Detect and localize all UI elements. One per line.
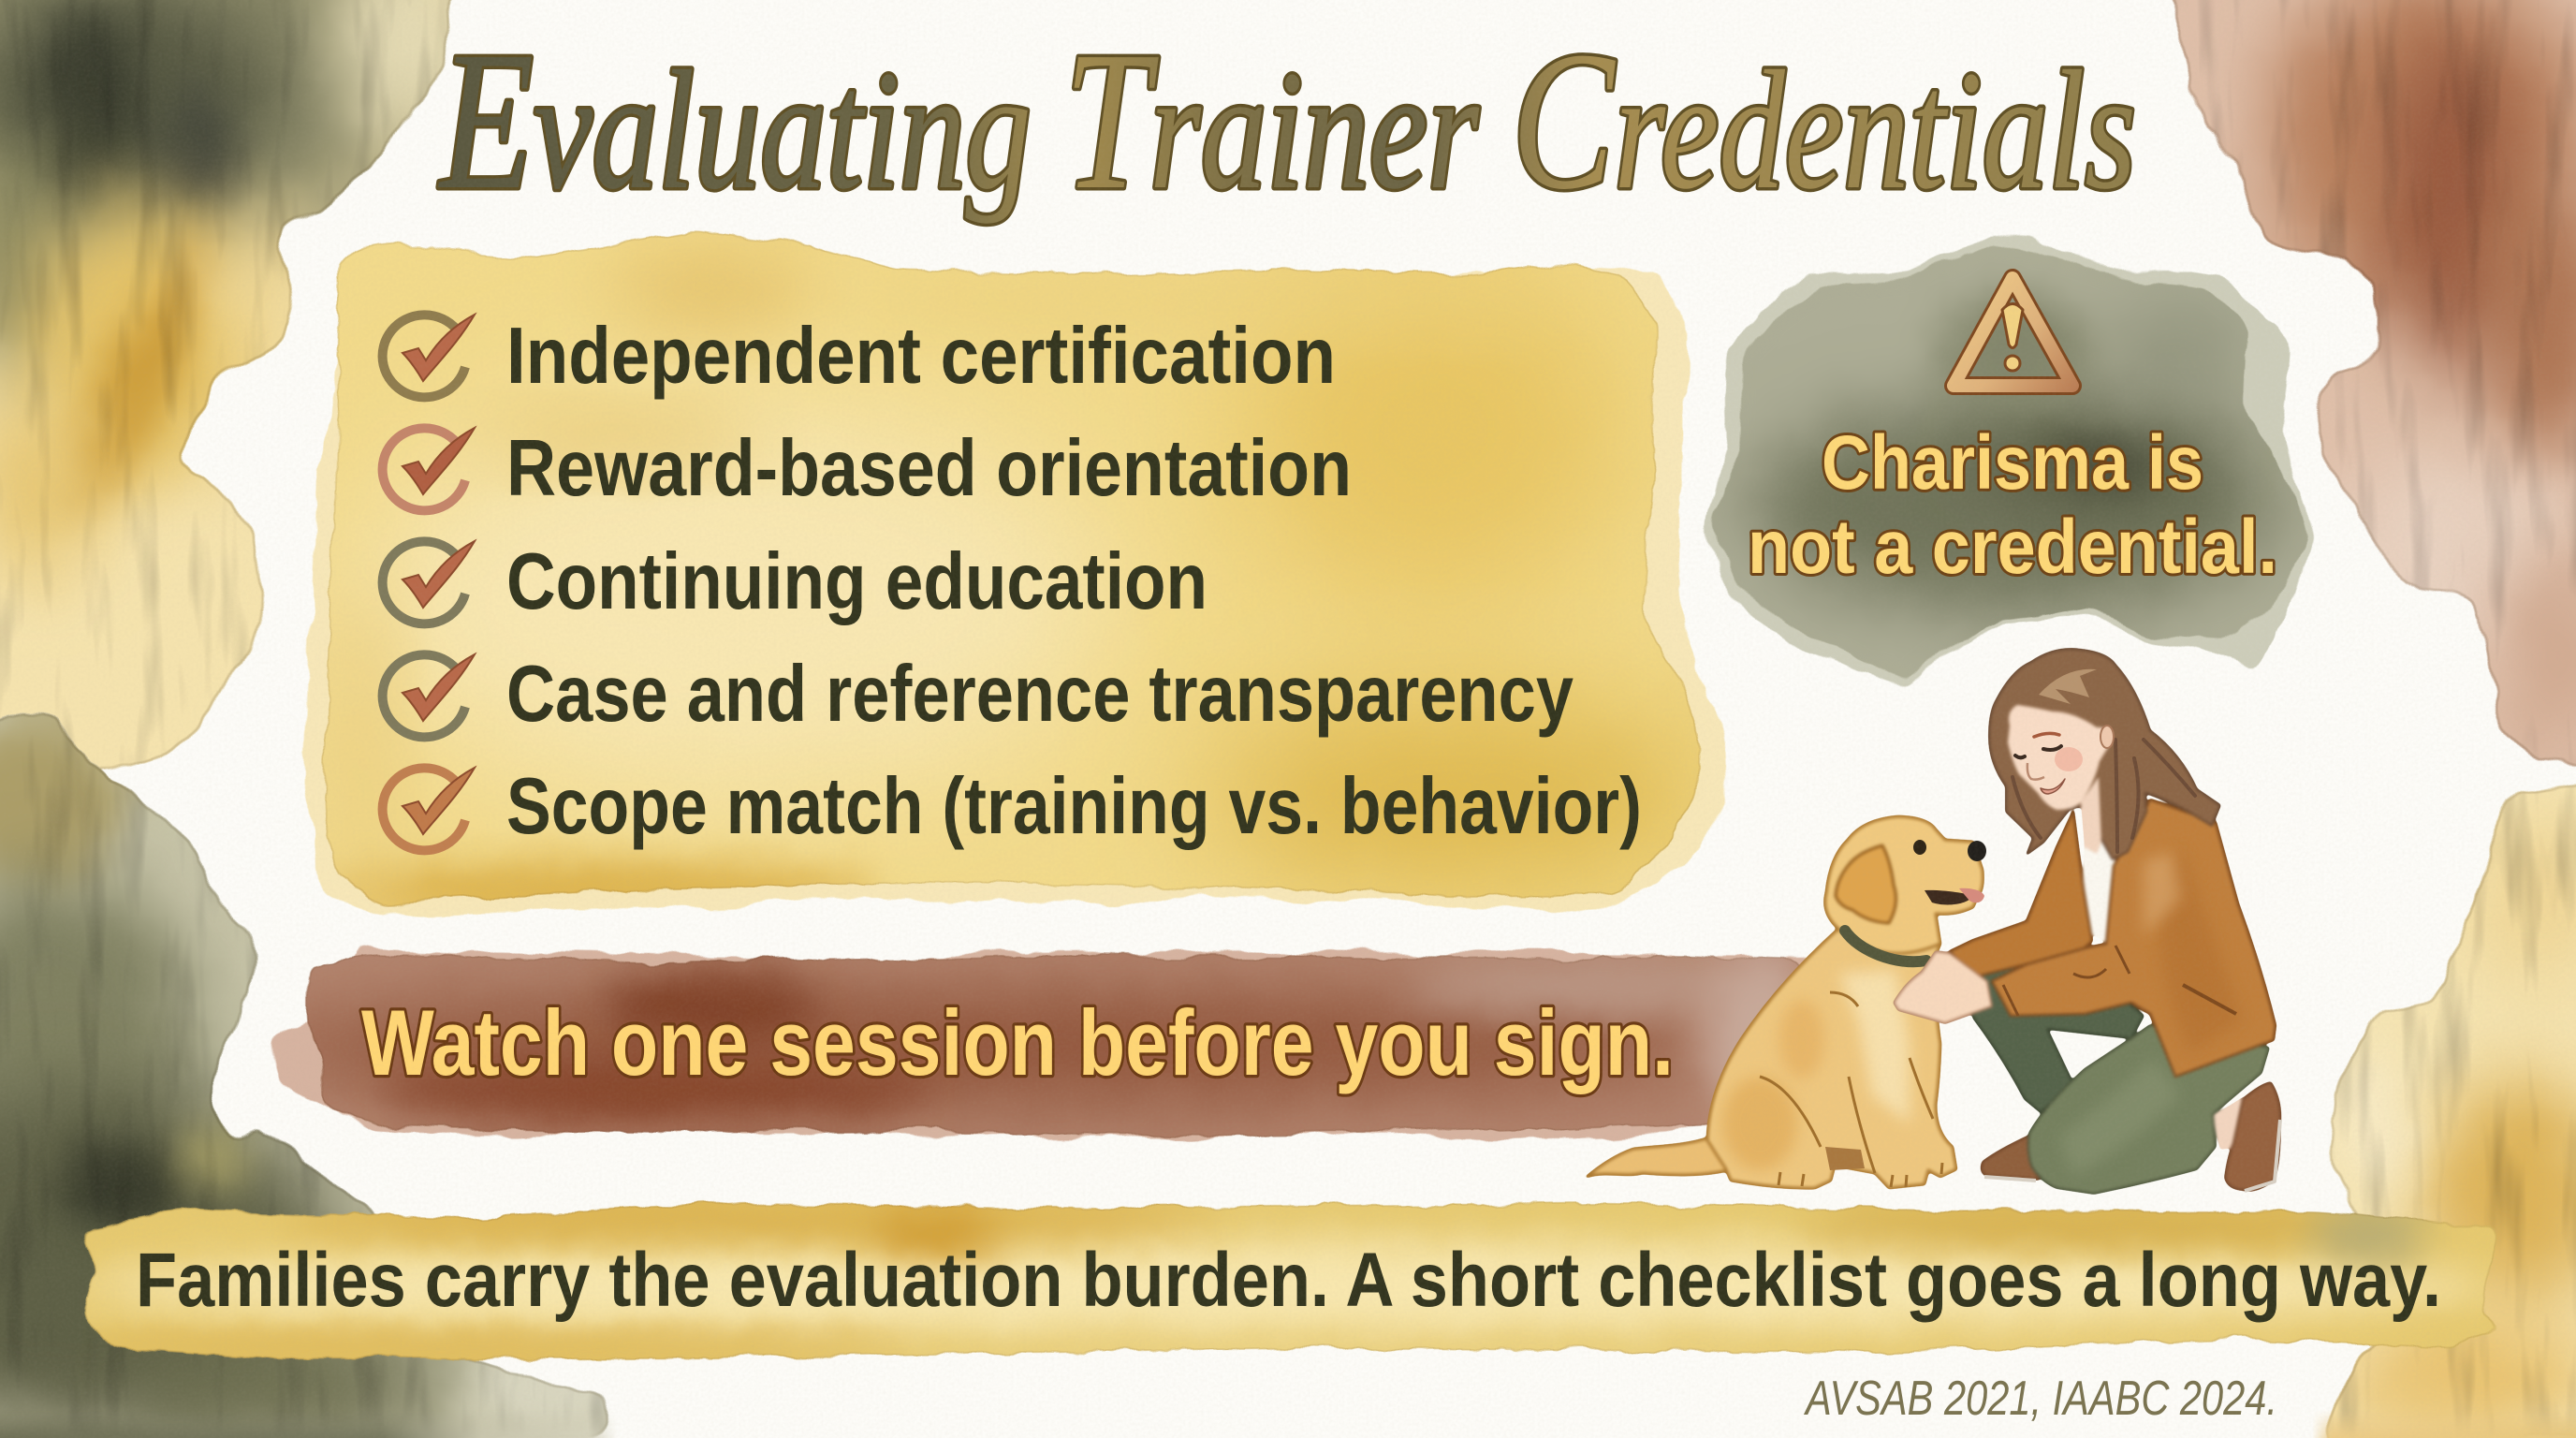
shirt [2084,818,2115,944]
callout text: Charisma is [1822,420,2203,506]
panel: checklist [300,215,1732,927]
dog head [1825,816,1983,953]
item text: Independent certification [506,312,1336,401]
jacket shading [2159,847,2242,1053]
panel: charisma warning [1685,225,2340,702]
icon: check mark [402,315,475,381]
item text: Scope match (training vs. behavior) [506,762,1642,851]
back hair [1989,649,2220,859]
banner wash [234,946,1825,1147]
smile [2041,779,2065,794]
watercolor wash: bottom left [0,712,655,1438]
leg highlight [2059,1058,2181,1175]
jacket body and near sleeve [1992,800,2276,1077]
dog under-belly shadow [1825,1147,1865,1170]
check item 1 [383,312,1336,401]
check item 5 [383,762,1642,851]
illustration: golden retriever [1587,816,1986,1188]
check item 3 [383,537,1208,626]
item text: Case and reference transparency [506,650,1573,739]
item text: Reward-based orientation [506,424,1352,513]
icon: check ring [383,541,465,624]
icon: check mark [402,428,475,494]
dog mouth [1925,890,1973,904]
jacket pale patch [2144,852,2181,936]
dog body [1707,927,1956,1188]
icon: warning dot [2005,356,2020,371]
panel wash [300,215,1732,927]
watercolor wash: bottom left lower edge [0,1417,614,1438]
nose [2027,763,2044,780]
banner: watch one session [234,946,1835,1147]
eyebrow [2034,733,2059,737]
dog shoulder patch [1779,1000,1824,1078]
callout text: not a credential. [1748,505,2277,590]
icon: check ring [383,428,465,510]
far sleeve [1950,811,2092,977]
watercolor wash: bottom right [2284,758,2576,1438]
illustration: trainer [1894,649,2280,1194]
dog shapes [1587,816,1983,1188]
dog chest highlight [1839,970,1910,1123]
kneeling leg [2028,1025,2269,1194]
banner text: Watch one session before you sign. [361,990,1674,1094]
dog eye [1913,840,1926,855]
trainer shapes [1894,649,2280,1194]
hair highlight [2039,669,2097,704]
ankle [2213,1097,2243,1150]
check item 4 [383,650,1573,739]
citation: AVSAB 2021, IAABC 2024. [1804,1372,2277,1426]
hair strands [2012,740,2195,852]
banner pale outer wash [267,949,1835,1138]
icon: check mark [402,541,475,608]
watercolor wash: bottom right lower edge [2312,1410,2576,1438]
icon: check ring [383,768,465,850]
raised leg [1973,944,2144,1112]
panel pale outer wash [304,267,1724,916]
sleeve creases and cuff line [2003,946,2130,1016]
dog collar [1845,931,1926,961]
icon: check mark [402,654,475,721]
callout wash [1685,225,2340,702]
banner: families checklist [19,1194,2518,1372]
dog shading [1722,1077,1797,1170]
icon: warning triangle [1954,278,2072,386]
neck [2081,777,2101,854]
check item 2 [383,424,1352,513]
dog tongue [1959,888,1984,902]
eyes [2015,746,2061,757]
callout pale outer wash [1706,234,2314,688]
dog ear [1836,845,1896,923]
back boot [2225,1082,2280,1191]
front shoe [1982,1135,2039,1180]
watercolor wash: top left [0,0,452,770]
face [2008,705,2110,810]
dog fur and paw lines [1760,992,1942,1187]
icon: check ring [383,315,465,397]
icon: check ring [383,654,465,737]
dog nose [1968,841,1986,861]
item text: Continuing education [506,537,1208,626]
shoe soles [1984,1120,2280,1191]
title: Evaluating Trainer Credentials [438,10,2136,230]
dog tail [1587,1137,1728,1177]
ear [2100,726,2114,748]
jacket pocket [2183,985,2236,1014]
watercolor wash: top right [2153,0,2576,805]
cheek blush [2055,747,2083,771]
illustration: dog and trainer [1587,649,2280,1194]
banner wash [19,1194,2518,1372]
icon: check mark [402,768,475,834]
hand [1894,951,1992,1023]
